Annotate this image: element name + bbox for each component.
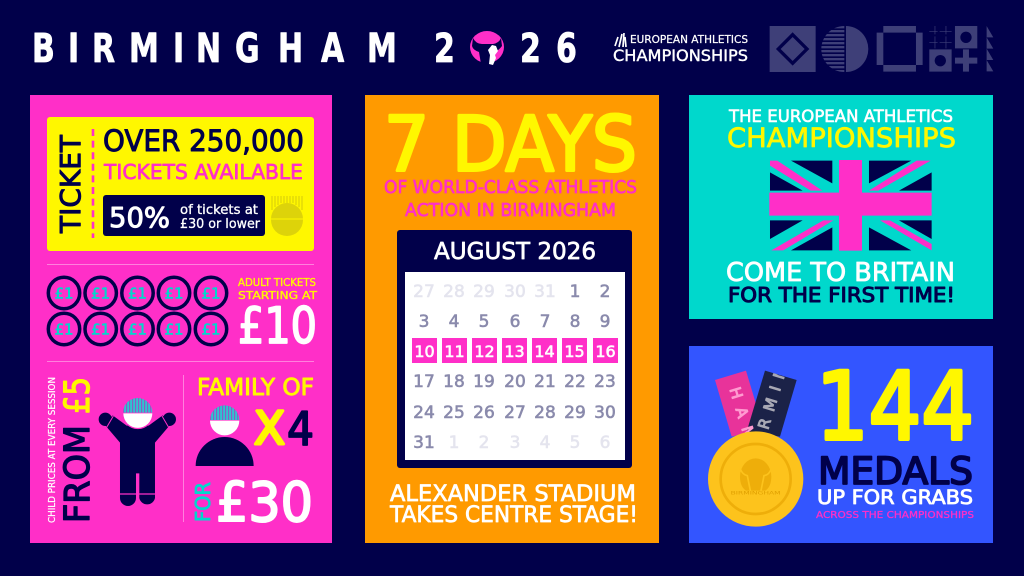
- highlighted championship dates: 13: [504, 342, 525, 361]
- calendar: 3: [419, 312, 429, 332]
- family ticket: X: [254, 402, 285, 455]
- calendar: 28: [534, 403, 556, 423]
- calendar: 2: [600, 282, 610, 302]
- ticket card: [47, 117, 314, 251]
- icon: medal: BIRMINGHAM: [731, 490, 781, 496]
- calendar: 5: [570, 433, 580, 453]
- 50 percent callout: £30 or lower: [180, 217, 261, 232]
- ten pound coins: £1: [128, 320, 147, 338]
- panel: come to Britain: THE EUROPEAN ATHLETICS: [728, 107, 953, 126]
- ten pound coins: £1: [54, 320, 74, 338]
- title: Birmingham 2026: [32, 26, 577, 72]
- panel: seven days: OF WORLD-CLASS ATHLETICS: [384, 178, 637, 198]
- highlighted championship dates: 11: [444, 342, 465, 361]
- icon: medal: HAM: [726, 385, 761, 451]
- title: Birmingham 2026: BIRMINGHAM: [32, 26, 397, 72]
- logo: European Athletics Championships: CHAMPIONSHIPS: [613, 46, 748, 65]
- calendar: 24: [413, 403, 435, 423]
- ticket card: OVER 250,000: [103, 124, 304, 158]
- calendar: 25: [443, 403, 465, 423]
- 50 percent callout: of tickets at: [180, 203, 258, 218]
- calendar: 26: [473, 403, 495, 423]
- calendar: 3: [510, 433, 520, 453]
- panel: come to Britain: COME TO BRITAIN: [726, 258, 955, 288]
- calendar: 18: [443, 372, 465, 392]
- calendar: 6: [600, 433, 610, 453]
- panel: seven days: [365, 95, 659, 543]
- panel: 144 medals: UP FOR GRABS: [817, 486, 973, 509]
- calendar: 22: [564, 372, 586, 392]
- panel: come to Britain: CHAMPIONSHIPS: [727, 123, 956, 154]
- calendar: 29: [564, 403, 586, 423]
- icon: square frame: [877, 26, 923, 72]
- ten pound coins: [48, 277, 227, 345]
- highlighted championship dates: 12: [474, 342, 495, 361]
- child prices: £5: [58, 377, 98, 414]
- ten pound coins: £1: [128, 284, 147, 302]
- calendar: 6: [510, 312, 520, 332]
- calendar: 9: [600, 312, 610, 332]
- calendar: 4: [449, 312, 459, 332]
- ticket card: TICKET: [54, 134, 87, 234]
- calendar: 30: [504, 282, 526, 302]
- icon: bull logo: [470, 31, 504, 65]
- adult ticket price: £10: [238, 297, 317, 355]
- highlighted championship dates: 14: [534, 342, 555, 361]
- ten pound coins: £1: [164, 284, 184, 302]
- logo: European Athletics Championships: [613, 33, 748, 65]
- calendar: 2: [479, 433, 489, 453]
- calendar: 31: [534, 282, 556, 302]
- icon: child figure: [99, 398, 176, 506]
- icon: diamond square: [770, 26, 816, 72]
- family ticket: [191, 375, 314, 534]
- panel: seven days: 7 DAYS: [384, 100, 637, 188]
- icon: faded logo: [271, 196, 303, 236]
- calendar: 5: [479, 312, 489, 332]
- highlighted championship dates: 10: [414, 342, 435, 361]
- highlighted championship dates: 15: [564, 342, 585, 361]
- calendar: [397, 230, 632, 468]
- panel: come to Britain: [689, 95, 993, 319]
- calendar: 29: [473, 282, 495, 302]
- child prices: CHILD PRICES AT EVERY SESSION: [47, 377, 58, 523]
- 50 percent callout: [103, 195, 265, 236]
- icon: triangles: [987, 26, 993, 71]
- calendar: 1: [570, 282, 580, 302]
- family ticket: FAMILY OF: [197, 375, 314, 401]
- panel: 144 medals: ACROSS THE CHAMPIONSHIPS: [816, 510, 974, 521]
- calendar: 30: [594, 403, 616, 423]
- ten pound coins: £1: [201, 320, 221, 338]
- child prices: FROM: [58, 425, 98, 523]
- family ticket: 4: [287, 402, 314, 456]
- calendar: 1: [449, 433, 459, 453]
- title: Birmingham 2026: 26: [520, 26, 577, 72]
- ten pound coins: £1: [54, 284, 74, 302]
- family ticket: £30: [216, 471, 313, 534]
- panel: 144 medals: 144: [816, 353, 974, 462]
- family ticket: FOR: [191, 482, 215, 522]
- panel: come to Britain: FOR THE FIRST TIME!: [728, 283, 955, 307]
- panel: seven days: ACTION IN BIRMINGHAM: [405, 201, 616, 221]
- ticket card: TICKETS AVAILABLE: [103, 160, 303, 184]
- icon: medal: RMIN: [755, 358, 793, 431]
- logo: European Athletics Championships: EUROPEAN ATHLETICS: [630, 33, 748, 46]
- panel: seven days: TAKES CENTRE STAGE!: [389, 503, 638, 528]
- highlighted championship dates: [412, 338, 618, 363]
- icon: union flag: [769, 160, 932, 251]
- child prices: [47, 377, 98, 523]
- adult ticket price: [238, 276, 317, 355]
- panel: 144 medals: [689, 346, 993, 543]
- calendar: 19: [473, 372, 495, 392]
- icon: medal: [708, 358, 803, 527]
- ten pound coins: £1: [201, 284, 221, 302]
- calendar: 7: [540, 312, 550, 332]
- icon: grid and plus tiles: [929, 26, 977, 72]
- 50 percent callout: 50%: [109, 201, 170, 234]
- calendar: 20: [504, 372, 526, 392]
- ten pound coins: £1: [91, 320, 110, 338]
- panel: tickets: [30, 95, 332, 543]
- adult ticket price: STARTING AT: [238, 289, 317, 302]
- calendar: AUGUST 2026: [434, 239, 596, 265]
- highlighted championship dates: 16: [595, 342, 616, 361]
- panel: seven days: ALEXANDER STADIUM: [390, 482, 636, 507]
- icon: adult figure: [196, 405, 254, 466]
- calendar: 8: [570, 312, 580, 332]
- ten pound coins: £1: [91, 284, 110, 302]
- icon: striped half circle: [821, 26, 868, 72]
- calendar: 17: [413, 372, 435, 392]
- calendar: 4: [540, 433, 550, 453]
- calendar: 27: [413, 282, 435, 302]
- calendar: 21: [534, 372, 556, 392]
- calendar: 27: [504, 403, 526, 423]
- title: Birmingham 2026: 2: [434, 26, 455, 72]
- decorative geometric icons: [770, 26, 993, 72]
- adult ticket price: ADULT TICKETS: [238, 276, 316, 289]
- calendar: 31: [413, 433, 435, 453]
- panel: 144 medals: MEDALS: [818, 450, 973, 493]
- calendar: 23: [594, 372, 616, 392]
- calendar: 28: [443, 282, 465, 302]
- ten pound coins: £1: [164, 320, 184, 338]
